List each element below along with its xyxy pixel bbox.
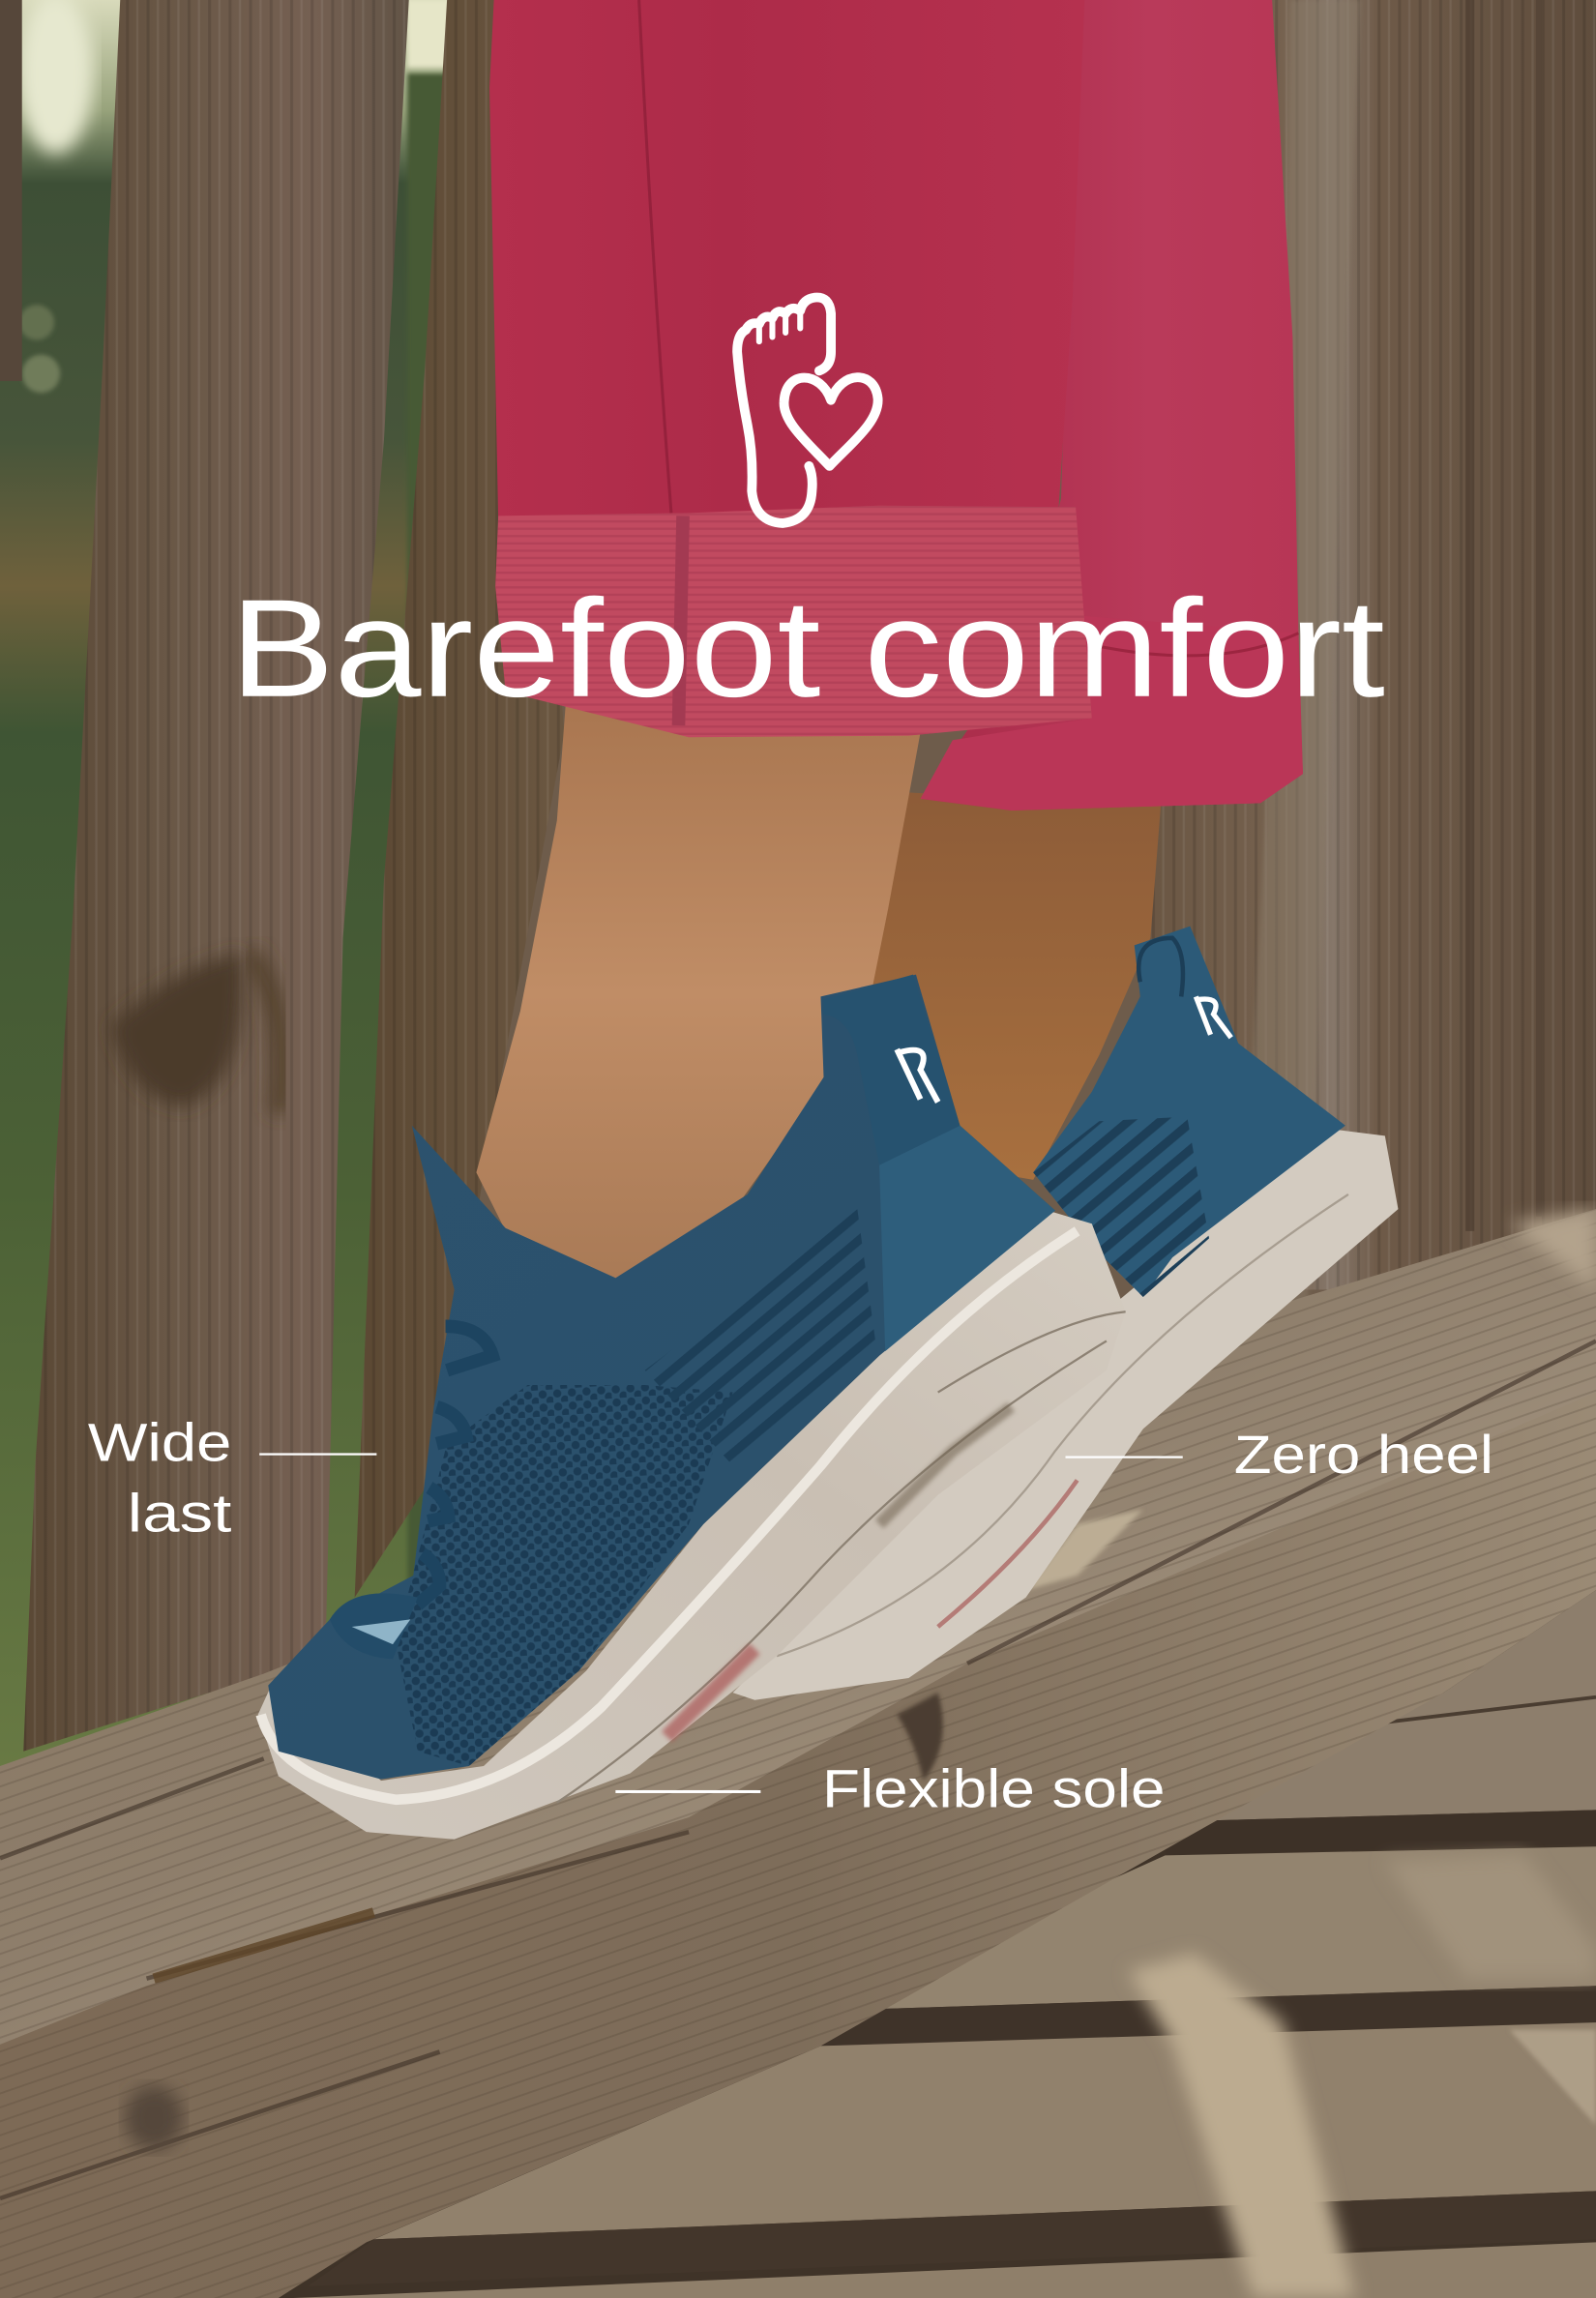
fence post left (23, 0, 409, 1752)
timber beam (0, 1209, 1596, 2298)
background foliage (0, 0, 469, 1832)
heel counter (879, 1126, 1055, 1351)
callout: wide last (88, 1412, 376, 1543)
callout: flexible sole (615, 1757, 1166, 1818)
front shoe upper (268, 975, 1055, 1780)
callout: flexible sole: Flexible sole (822, 1757, 1166, 1818)
front pant leg (489, 0, 1092, 737)
callout: zero heel: Zero heel (1234, 1424, 1493, 1485)
back shoe logo (1196, 996, 1231, 1038)
pant cuff (495, 506, 1092, 737)
fence post middle (355, 0, 564, 1598)
back leg (865, 791, 1161, 1180)
right fence (1143, 0, 1596, 1319)
callout: wide last: last (128, 1482, 232, 1543)
back shoe upper (1033, 927, 1345, 1297)
back shoe (733, 927, 1398, 1700)
title: Barefoot comfort (230, 571, 1385, 726)
front shoe sole (258, 1211, 1126, 1840)
front shoe (258, 975, 1126, 1840)
back pant leg (921, 0, 1303, 810)
icon: foot with heart (737, 297, 878, 523)
knit texture (396, 1385, 733, 1766)
front leg (476, 703, 921, 1282)
callout: wide last: Wide (88, 1412, 231, 1473)
deck planks (279, 1524, 1596, 2298)
front shoe logo (897, 1049, 938, 1103)
pull tab (824, 975, 960, 1165)
back shoe sole (733, 1129, 1398, 1700)
laces (418, 1326, 492, 1605)
